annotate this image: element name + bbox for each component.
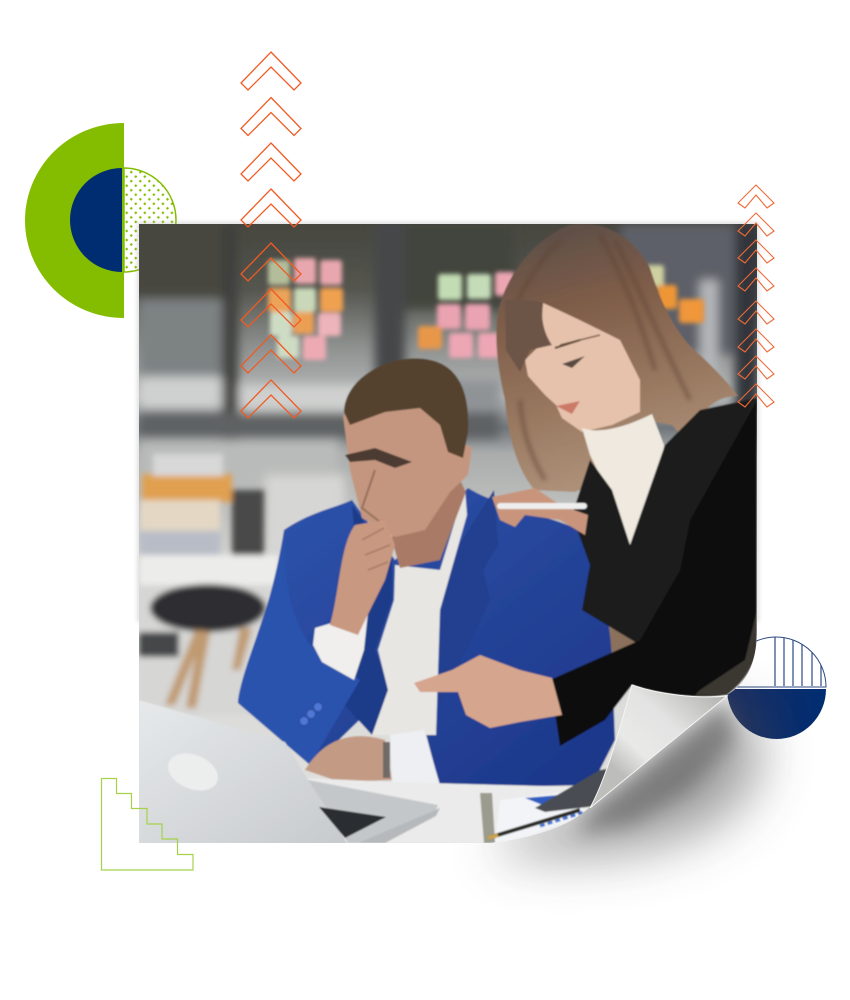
- woman: black blazer: [550, 398, 757, 746]
- decoration: orange chevrons left column: [241, 52, 301, 418]
- woman: hair: [496, 224, 738, 492]
- decoration: green outlined staircase: [102, 778, 193, 870]
- man: hand at chin and cuff: [313, 520, 395, 680]
- page curl flap: [590, 685, 727, 808]
- man: lower forearm and cuff: [305, 730, 440, 785]
- photo: two colleagues at a laptop: [130, 220, 761, 850]
- office background: [130, 220, 761, 850]
- woman: turtleneck: [582, 414, 664, 545]
- blurred sticky notes: [268, 258, 704, 360]
- man: white shirt: [372, 488, 467, 735]
- laptop: [139, 700, 440, 845]
- man: blue suit: [238, 488, 615, 788]
- illustration: photo poster with decorative shapes: [25, 51, 826, 890]
- decoration: navy half circle: [70, 168, 122, 272]
- desk items: notebook and pen: [480, 768, 612, 843]
- man: head and hair: [343, 358, 472, 537]
- desk: [308, 778, 590, 842]
- woman: hand and pen on shoulder: [492, 488, 588, 535]
- woman: face: [505, 300, 640, 432]
- blurred desk and chair: [139, 454, 644, 715]
- page curl shadow: [137, 222, 761, 857]
- decoration: navy striped circle: [726, 637, 826, 739]
- man: neck: [392, 470, 466, 568]
- decoration: green half ring: [25, 123, 124, 318]
- woman: pointing hand: [414, 655, 562, 728]
- decoration: orange chevrons right column: [738, 185, 774, 407]
- decoration: dotted half circle: [124, 168, 176, 272]
